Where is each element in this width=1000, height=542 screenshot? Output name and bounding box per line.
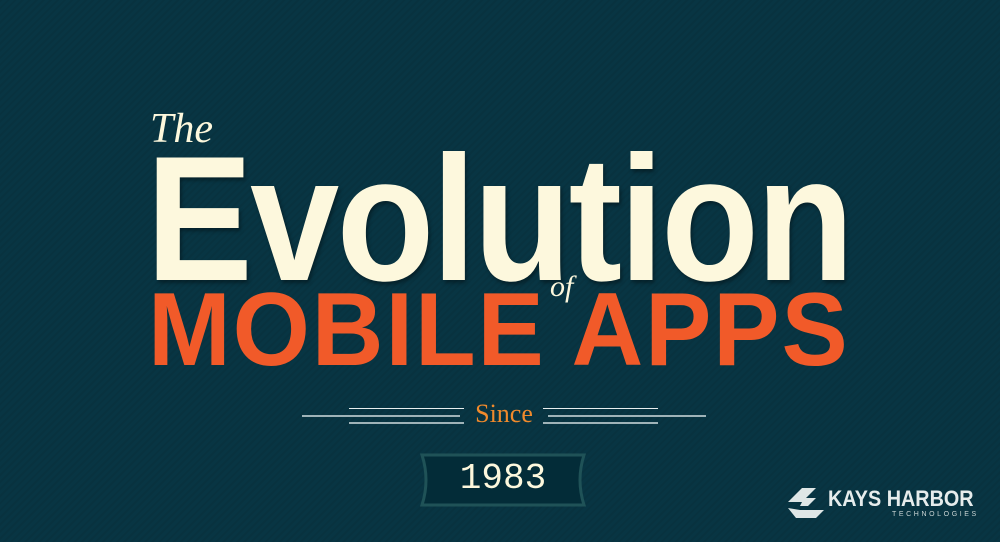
- title: Mobile Apps: MOBILE APPS: [148, 272, 850, 388]
- logo: Kays Harbor: KAYS HARBOR: [828, 486, 974, 511]
- logo: Kays Harbor: TECHNOLOGIES: [892, 511, 979, 518]
- logo: Kays Harbor: [788, 486, 979, 518]
- icon: logo mark: [788, 488, 824, 518]
- title: of: of: [550, 270, 573, 303]
- year badge: 1983: [420, 454, 586, 506]
- title: The: The: [150, 106, 213, 152]
- year badge: 1983: 1983: [460, 458, 546, 499]
- title: Evolution: Evolution: [146, 119, 851, 318]
- text: Since: Since: [475, 399, 533, 428]
